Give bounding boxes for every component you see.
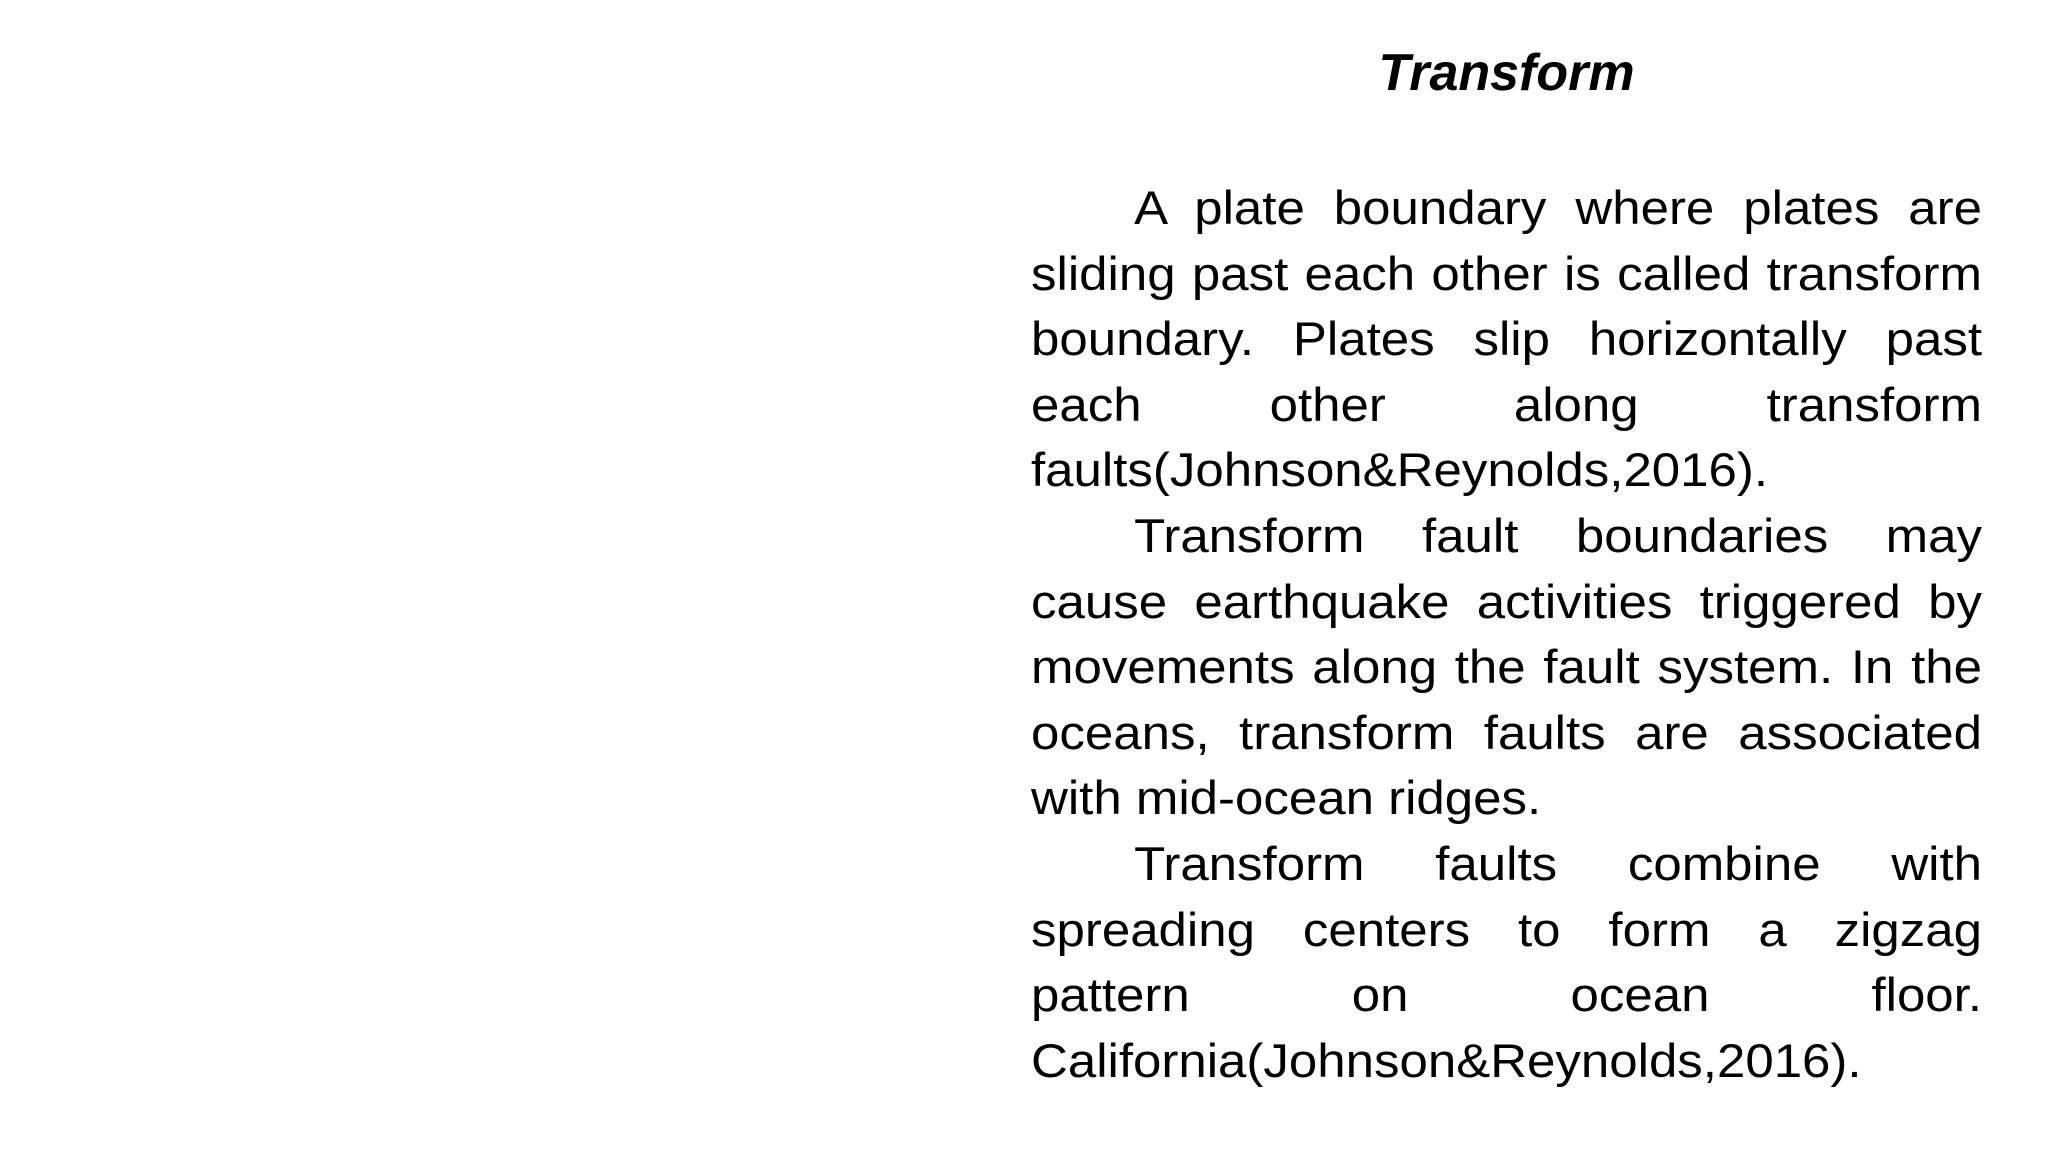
paragraph 1: sliding past each other is called transform	[1031, 247, 1982, 300]
paragraph 3: Transform faults combine with	[1134, 837, 1982, 890]
paragraph 3: California(Johnson&Reynolds,2016).	[1031, 1034, 1862, 1087]
paragraph 1: faults(Johnson&Reynolds,2016).	[1031, 443, 1768, 496]
paragraph 2: movements along the fault system. In the	[1031, 640, 1982, 693]
paragraph 3	[1031, 837, 1982, 1087]
paragraph 2: with mid-ocean ridges.	[1031, 771, 1541, 824]
paragraph 1: each other along transform	[1031, 378, 1982, 431]
text block: description	[1030, 181, 1982, 1087]
paragraph 1: boundary. Plates slip horizontally past	[1031, 312, 1982, 365]
paragraph 3: pattern on ocean floor.	[1031, 968, 1982, 1021]
paragraph 2: Transform fault boundaries may	[1134, 509, 1982, 562]
paragraph 1	[1031, 181, 1982, 496]
paragraph 2: cause earthquake activities triggered by	[1031, 575, 1982, 628]
paragraph 2: oceans, transform faults are associated	[1031, 706, 1982, 759]
paragraph 1: A plate boundary where plates are	[1134, 181, 1982, 234]
title: Transform	[1378, 44, 1635, 102]
paragraph 3: spreading centers to form a zigzag	[1031, 903, 1982, 956]
paragraph 2	[1030, 509, 1982, 824]
